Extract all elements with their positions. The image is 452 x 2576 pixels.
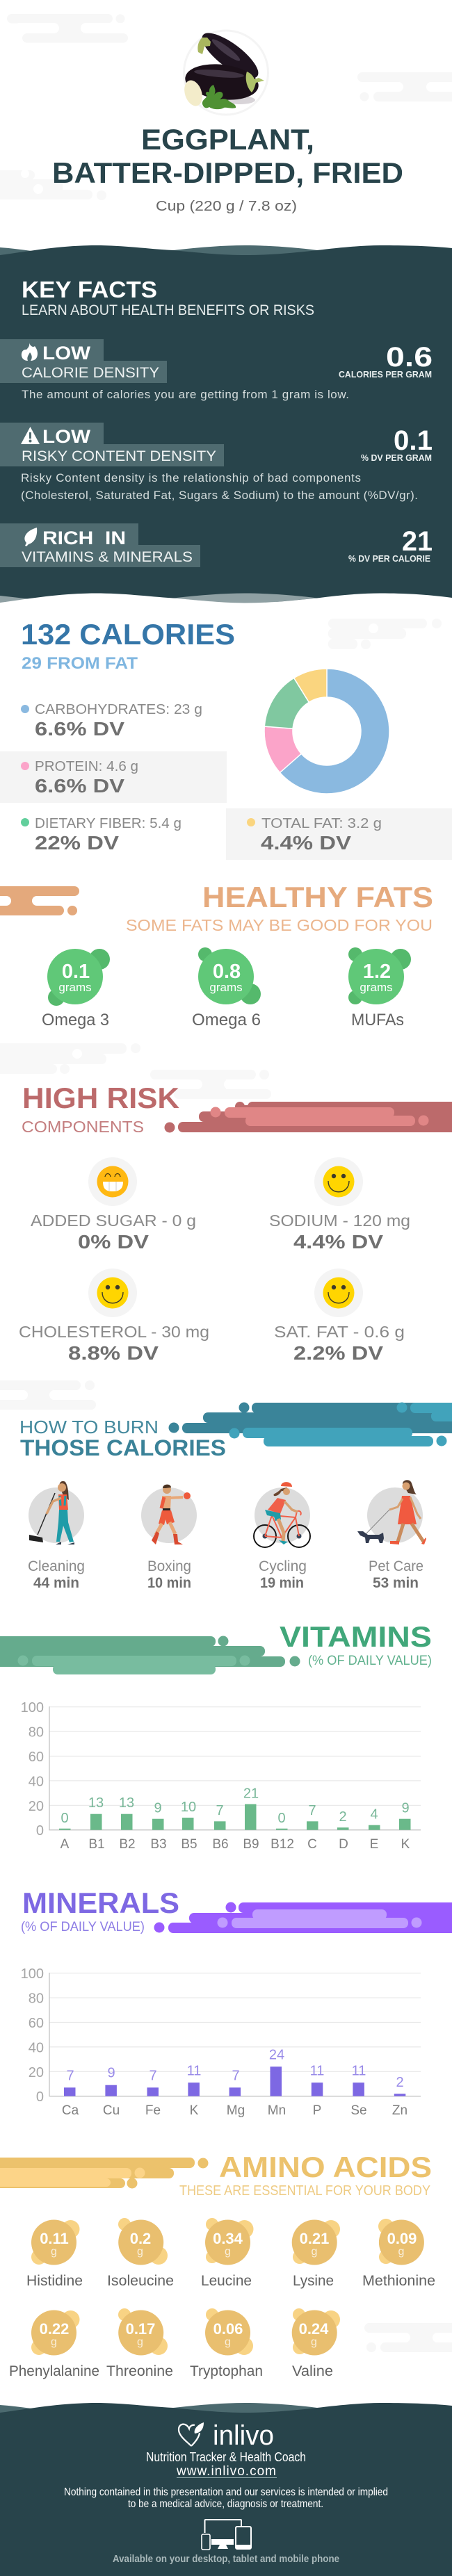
bar chart: vitamins: 7 <box>308 1803 316 1818</box>
fat calories subheading: 29 FROM FAT <box>22 654 138 673</box>
bar chart: minerals: Mn <box>268 2103 286 2118</box>
bar chart: vitamins: 9 <box>154 1800 162 1816</box>
rich in value <box>348 526 433 564</box>
wave bottom <box>0 594 452 608</box>
activity: pet care: Pet Care <box>369 1558 423 1574</box>
icon: devices <box>202 2520 251 2550</box>
risky content description: Risky Content density is the relationship of bad components <box>21 471 361 484</box>
methionine: g <box>398 2246 404 2258</box>
activity: cleaning: Cleaning <box>28 1558 85 1574</box>
lysine: 0.21 <box>300 2230 329 2247</box>
omega 6: Omega 6 <box>192 1011 261 1029</box>
risky content badge <box>0 423 224 466</box>
bar chart: minerals: Se <box>350 2103 367 2118</box>
panel: vitamins <box>0 1620 432 1852</box>
bar chart: minerals: Mg <box>227 2103 245 2118</box>
calorie density badge <box>0 339 167 383</box>
bar chart: minerals: 9 <box>107 2066 115 2081</box>
phenylalanine: g <box>51 2336 57 2348</box>
methionine <box>362 2219 435 2289</box>
icon: smiling face <box>323 1166 355 1197</box>
lysine <box>292 2220 340 2289</box>
healthy fats heading: HEALTHY FATS <box>202 881 433 913</box>
decorative banner <box>164 1102 452 1133</box>
sodium: 4.4% DV <box>293 1231 383 1253</box>
decorative banner <box>0 2158 209 2188</box>
threonine: 0.17 <box>126 2320 155 2338</box>
calories heading: 132 CALORIES <box>21 618 235 651</box>
logo wordmark: inlivo <box>213 2420 274 2451</box>
bar chart: vitamins: 100 <box>21 1700 44 1715</box>
donut chart <box>264 669 389 794</box>
high risk subheading: COMPONENTS <box>22 1118 144 1136</box>
bar chart: minerals: 11 <box>310 2063 324 2078</box>
legend: protein: PROTEIN: 4.6 g <box>35 759 138 774</box>
bar chart: minerals: 60 <box>29 2016 44 2031</box>
saturated fat: SAT. FAT - 0.6 g <box>274 1323 405 1341</box>
bar chart: minerals: Ca <box>62 2103 79 2118</box>
icon: person sweeping <box>29 1481 74 1544</box>
bar chart: vitamins: B12 <box>271 1837 294 1852</box>
bar chart: vitamins: 10 <box>181 1800 196 1815</box>
mufas <box>348 947 411 1029</box>
bar chart: vitamins: 0 <box>36 1823 44 1839</box>
panel: minerals <box>21 1886 452 2118</box>
disclaimer <box>64 2486 388 2510</box>
legend: carbohydrates: CARBOHYDRATES: 23 g <box>35 702 202 717</box>
phenylalanine <box>9 2310 99 2379</box>
bar chart: vitamins: B3 <box>150 1837 167 1852</box>
leucine <box>201 2218 253 2289</box>
minerals subheading: (% OF DAILY VALUE) <box>21 1920 145 1934</box>
risky content value: % DV PER GRAM <box>361 453 432 463</box>
sodium <box>269 1157 410 1253</box>
icon: smiling face <box>97 1278 128 1308</box>
tryptophan <box>190 2308 263 2379</box>
threonine: g <box>137 2336 143 2348</box>
bar chart: minerals: 100 <box>21 1966 44 1982</box>
omega 6: grams <box>209 981 243 994</box>
legend: dietary fiber: 22% DV <box>35 832 119 854</box>
bar chart: vitamins: 21 <box>243 1786 259 1802</box>
legend: dietary fiber <box>21 816 181 854</box>
added sugar <box>31 1157 196 1253</box>
amino acids heading: AMINO ACIDS <box>219 2151 432 2183</box>
phenylalanine: Phenylalanine <box>9 2363 99 2379</box>
bar chart: minerals: 2 <box>396 2075 404 2090</box>
decorative cloud <box>0 886 79 915</box>
disclaimer: Nothing contained in this presentation and our services is intended or implied <box>64 2486 388 2498</box>
decorative cloud <box>364 2323 452 2352</box>
legend: protein <box>0 751 227 803</box>
isoleucine: 0.2 <box>130 2230 151 2247</box>
risky content value <box>361 425 433 463</box>
isoleucine: Isoleucine <box>107 2273 174 2289</box>
panel: key facts <box>0 245 452 608</box>
tagline: Nutrition Tracker & Health Coach <box>146 2449 306 2464</box>
activity: cycling: 19 min <box>260 1575 304 1591</box>
bar chart: minerals: 40 <box>29 2041 44 2056</box>
bar chart: minerals: Fe <box>145 2103 161 2118</box>
decorative clouds <box>0 1043 273 1099</box>
title <box>52 123 403 189</box>
bar chart: vitamins: B9 <box>243 1837 259 1852</box>
threonine: Threonine <box>106 2363 173 2379</box>
lysine: Lysine <box>293 2273 334 2289</box>
header section <box>0 14 452 214</box>
calorie density badge: LOW <box>42 343 91 364</box>
bar chart: vitamins: 9 <box>401 1800 410 1816</box>
bar chart: minerals: 7 <box>149 2069 157 2084</box>
calorie density badge: CALORIE DENSITY <box>22 365 159 381</box>
bar chart: vitamins: 0 <box>60 1811 69 1826</box>
rich in value: 21 <box>402 526 433 557</box>
bar chart: vitamins: C <box>307 1837 317 1852</box>
bar chart: minerals: 0 <box>36 2089 44 2105</box>
title: BATTER-DIPPED, FRIED <box>52 156 403 189</box>
cholesterol: 8.8% DV <box>68 1342 159 1364</box>
bar chart: minerals: 7 <box>66 2069 74 2084</box>
amino acids subheading: THESE ARE ESSENTIAL FOR YOUR BODY <box>179 2183 430 2199</box>
tryptophan: Tryptophan <box>190 2363 263 2379</box>
bar chart: minerals: 11 <box>187 2063 201 2078</box>
vitamins subheading: (% OF DAILY VALUE) <box>308 1654 432 1668</box>
bar chart: vitamins: 7 <box>216 1803 224 1818</box>
calorie density value: CALORIES PER GRAM <box>339 369 432 380</box>
bar chart: minerals: Zn <box>392 2103 407 2118</box>
cholesterol <box>19 1269 209 1364</box>
histidine: g <box>51 2246 57 2258</box>
risky content description <box>21 471 418 502</box>
decorative banner <box>154 1902 452 1933</box>
leucine: 0.34 <box>213 2230 243 2247</box>
risky content badge: RISKY CONTENT DENSITY <box>22 448 216 464</box>
minerals heading: MINERALS <box>22 1886 179 1919</box>
bar chart: vitamins: 4 <box>370 1807 378 1823</box>
decorative cloud left <box>0 170 106 200</box>
bar chart: minerals: 11 <box>352 2063 366 2078</box>
bar chart: minerals: 20 <box>29 2065 44 2080</box>
bar chart: vitamins: B6 <box>212 1837 229 1852</box>
valine <box>292 2308 340 2379</box>
leucine: Leucine <box>201 2273 252 2289</box>
key facts subheading: LEARN ABOUT HEALTH BENEFITS OR RISKS <box>22 302 314 318</box>
icon: leaf <box>24 528 37 546</box>
histidine: Histidine <box>26 2273 83 2289</box>
wave <box>0 2403 452 2576</box>
panel: high risk components <box>0 1043 452 1364</box>
icon: inlivo heart logo <box>179 2422 204 2446</box>
bar chart: minerals: 80 <box>29 1991 44 2006</box>
omega 3: Omega 3 <box>42 1011 109 1029</box>
burn heading: THOSE CALORIES <box>20 1435 226 1460</box>
decorative cloud <box>328 619 442 649</box>
valine: g <box>311 2336 317 2348</box>
bar chart: minerals: 7 <box>232 2069 240 2084</box>
bar chart: minerals: P <box>313 2103 321 2118</box>
lysine: g <box>312 2246 317 2258</box>
saturated fat: 2.2% DV <box>293 1342 383 1364</box>
rich in badge: RICH IN <box>42 528 126 548</box>
rich in badge: VITAMINS & MINERALS <box>22 549 193 565</box>
bar chart: minerals: Cu <box>103 2103 120 2118</box>
bar chart: vitamins: E <box>370 1837 378 1852</box>
cholesterol: CHOLESTEROL - 30 mg <box>19 1323 209 1341</box>
omega 3 <box>42 949 110 1029</box>
legend: carbohydrates <box>21 702 202 740</box>
icon: cyclist <box>254 1482 310 1547</box>
legend: total fat <box>226 808 452 860</box>
icon: grinning face <box>97 1166 128 1197</box>
risky content description: (Cholesterol, Saturated Fat, Sugars & Sodium) to the amount (%DV/gr). <box>21 489 418 502</box>
activity: boxing: Boxing <box>147 1558 191 1574</box>
website link: www.inlivo.com <box>176 2464 276 2479</box>
bar chart: vitamins: B1 <box>88 1837 105 1852</box>
icon: person walking dog <box>357 1480 426 1544</box>
bar chart: vitamins: 20 <box>29 1799 44 1814</box>
panel: amino acids <box>0 2151 452 2379</box>
bar chart: minerals: 24 <box>269 2048 284 2063</box>
risky content badge: LOW <box>42 426 91 447</box>
high risk heading: HIGH RISK <box>22 1082 179 1114</box>
bar chart: vitamins: 80 <box>29 1725 44 1741</box>
methionine: 0.09 <box>387 2230 417 2247</box>
panel: footer <box>0 2403 452 2576</box>
activity: boxing: 10 min <box>147 1575 191 1591</box>
disclaimer: to be a medical advice, diagnosis or treatment. <box>128 2498 323 2510</box>
mufas: MUFAs <box>351 1011 404 1029</box>
activity: boxing <box>141 1485 197 1591</box>
bar chart: vitamins: 60 <box>29 1750 44 1765</box>
title: EGGPLANT, <box>141 123 314 156</box>
vitamins heading: VITAMINS <box>280 1620 432 1653</box>
risky content value: 0.1 <box>394 425 433 456</box>
bar chart: vitamins: B2 <box>119 1837 136 1852</box>
saturated fat <box>274 1269 405 1364</box>
legend: total fat: TOTAL FAT: 3.2 g <box>261 816 382 831</box>
rich in badge <box>0 523 200 567</box>
bar chart: vitamins: D <box>339 1837 348 1852</box>
added sugar: 0% DV <box>78 1231 149 1253</box>
histidine: 0.11 <box>40 2230 69 2247</box>
legend: dietary fiber: DIETARY FIBER: 5.4 g <box>35 816 181 831</box>
decorative cloud right <box>357 72 452 101</box>
bar chart: vitamins: B5 <box>181 1837 197 1852</box>
isoleucine <box>107 2218 174 2289</box>
icon: warning triangle <box>21 427 40 444</box>
histidine <box>26 2220 83 2289</box>
burn heading <box>19 1417 226 1460</box>
icon: eggplant photo in circle <box>181 26 268 115</box>
panel: calories <box>0 618 452 860</box>
icon: smiling face <box>323 1278 355 1308</box>
serving size: Cup (220 g / 7.8 oz) <box>156 199 297 214</box>
legend: carbohydrates: 6.6% DV <box>35 718 124 740</box>
omega 6: 0.8 <box>213 961 241 983</box>
activity: cycling <box>254 1482 310 1591</box>
isoleucine: g <box>137 2246 143 2258</box>
bar chart: vitamins: 0 <box>277 1811 286 1826</box>
rich in value: % DV PER CALORIE <box>348 553 430 564</box>
methionine: Methionine <box>362 2273 435 2289</box>
activity: pet care: 53 min <box>373 1575 419 1591</box>
wave top <box>0 245 452 605</box>
activity: cleaning <box>28 1481 85 1591</box>
bar chart: vitamins: A <box>60 1837 70 1852</box>
tryptophan: g <box>225 2336 231 2348</box>
bar chart: minerals: K <box>190 2103 199 2118</box>
decorative banner <box>0 1636 300 1674</box>
icon: flame <box>22 343 38 361</box>
legend: total fat: 4.4% DV <box>261 832 351 854</box>
tryptophan: 0.06 <box>213 2320 243 2338</box>
healthy fats subheading: SOME FATS MAY BE GOOD FOR YOU <box>126 916 433 934</box>
bar chart: minerals <box>21 1966 421 2118</box>
legend: protein: 6.6% DV <box>35 775 124 797</box>
valine: Valine <box>292 2363 333 2379</box>
activity: pet care <box>357 1480 426 1591</box>
omega 3: 0.1 <box>62 961 90 983</box>
bar chart: vitamins: 2 <box>339 1809 347 1825</box>
mufas: grams <box>360 981 393 994</box>
mufas: 1.2 <box>363 961 391 983</box>
omega 6 <box>192 947 261 1029</box>
bar chart: vitamins: 40 <box>29 1774 44 1789</box>
calorie density value <box>339 342 433 380</box>
leucine: g <box>225 2246 231 2258</box>
decorative cloud top left <box>7 14 129 43</box>
omega 3: grams <box>58 981 92 994</box>
decorative cloud <box>0 1380 96 1410</box>
calorie density description: The amount of calories you are getting from 1 gram is low. <box>22 388 349 401</box>
panel: healthy fats <box>0 881 433 1029</box>
activity: cycling: Cycling <box>259 1558 307 1574</box>
bar chart: vitamins: K <box>401 1837 410 1852</box>
sodium: SODIUM - 120 mg <box>269 1212 410 1230</box>
key facts heading: KEY FACTS <box>22 277 157 302</box>
panel: how to burn calories <box>0 1380 452 1591</box>
availability note: Available on your desktop, tablet and mobile phone <box>113 2553 339 2565</box>
bar chart: vitamins: 13 <box>119 1795 134 1811</box>
activity: cleaning: 44 min <box>33 1575 79 1591</box>
phenylalanine: 0.22 <box>40 2320 69 2338</box>
valine: 0.24 <box>299 2320 329 2338</box>
bar chart: vitamins: 13 <box>88 1795 104 1811</box>
icon: boxer <box>152 1485 191 1544</box>
threonine <box>106 2308 173 2379</box>
added sugar: ADDED SUGAR - 0 g <box>31 1212 196 1230</box>
decorative banner <box>168 1403 452 1446</box>
bar chart: vitamins <box>21 1700 421 1852</box>
calorie density value: 0.6 <box>386 342 433 373</box>
burn heading: HOW TO BURN <box>19 1417 159 1437</box>
